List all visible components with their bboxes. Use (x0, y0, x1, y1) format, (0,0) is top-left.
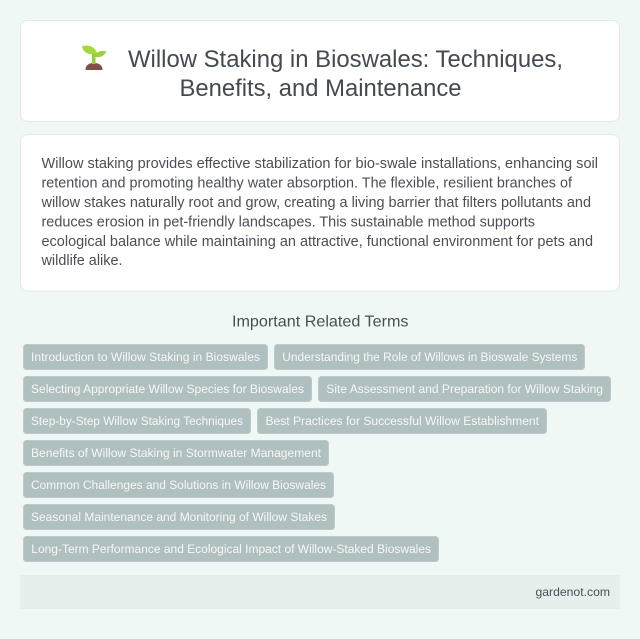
text block: description (41, 156, 598, 269)
tag (24, 344, 268, 370)
tag: Seasonal Maintenance and Monitoring of Willow Stakes (31, 510, 327, 524)
heading: related terms: Important Related Terms (232, 314, 408, 330)
footer credit: gardenot.com (536, 585, 610, 599)
tag: Selecting Appropriate Willow Species for Bioswales (31, 382, 304, 396)
tag: Common Challenges and Solutions in Willow Bioswales (31, 478, 326, 492)
tag: Site Assessment and Preparation for Willow Staking (326, 382, 603, 396)
title (128, 46, 563, 102)
tag: Understanding the Role of Willows in Bioswale Systems (282, 350, 577, 364)
tag (24, 472, 334, 498)
text block: description: ecological balance while maintaining an attractive, functional environment for pets and (42, 234, 593, 250)
text block: description: wildlife alike. (41, 253, 122, 269)
footer (20, 575, 620, 609)
tag: Step-by-Step Willow Staking Techniques (31, 414, 243, 428)
title: Benefits, and Maintenance (180, 75, 462, 102)
tag (24, 504, 334, 530)
text block: description: Willow staking provides effective stabilization for bio-swale installations, enhancing soil (42, 156, 598, 172)
tag: Long-Term Performance and Ecological Impact of Willow-Staked Bioswales (31, 542, 431, 556)
panel: description (20, 134, 620, 291)
tag (24, 376, 312, 402)
tag: Benefits of Willow Staking in Stormwater Management (31, 446, 322, 460)
tag list (24, 344, 610, 562)
text block: description: retention and promoting healthy water absorption. The flexible, resilient branches of (42, 176, 573, 192)
tag (318, 376, 610, 402)
tag: Introduction to Willow Staking in Bioswales (31, 350, 260, 364)
tag (274, 344, 584, 370)
tag (24, 536, 438, 562)
icon: seedling (82, 46, 106, 70)
tag (24, 408, 250, 434)
text block: description: willow stakes naturally root and grow, creating a living barrier that filters pollutants and (41, 195, 591, 211)
text block: description: reduces erosion in pet-friendly landscapes. This sustainable method supports (42, 214, 535, 230)
panel: header (20, 20, 620, 122)
tag: Best Practices for Successful Willow Establishment (266, 414, 540, 428)
tag (258, 408, 546, 434)
title: Willow Staking in Bioswales: Techniques, (128, 46, 563, 73)
tag (24, 440, 328, 466)
